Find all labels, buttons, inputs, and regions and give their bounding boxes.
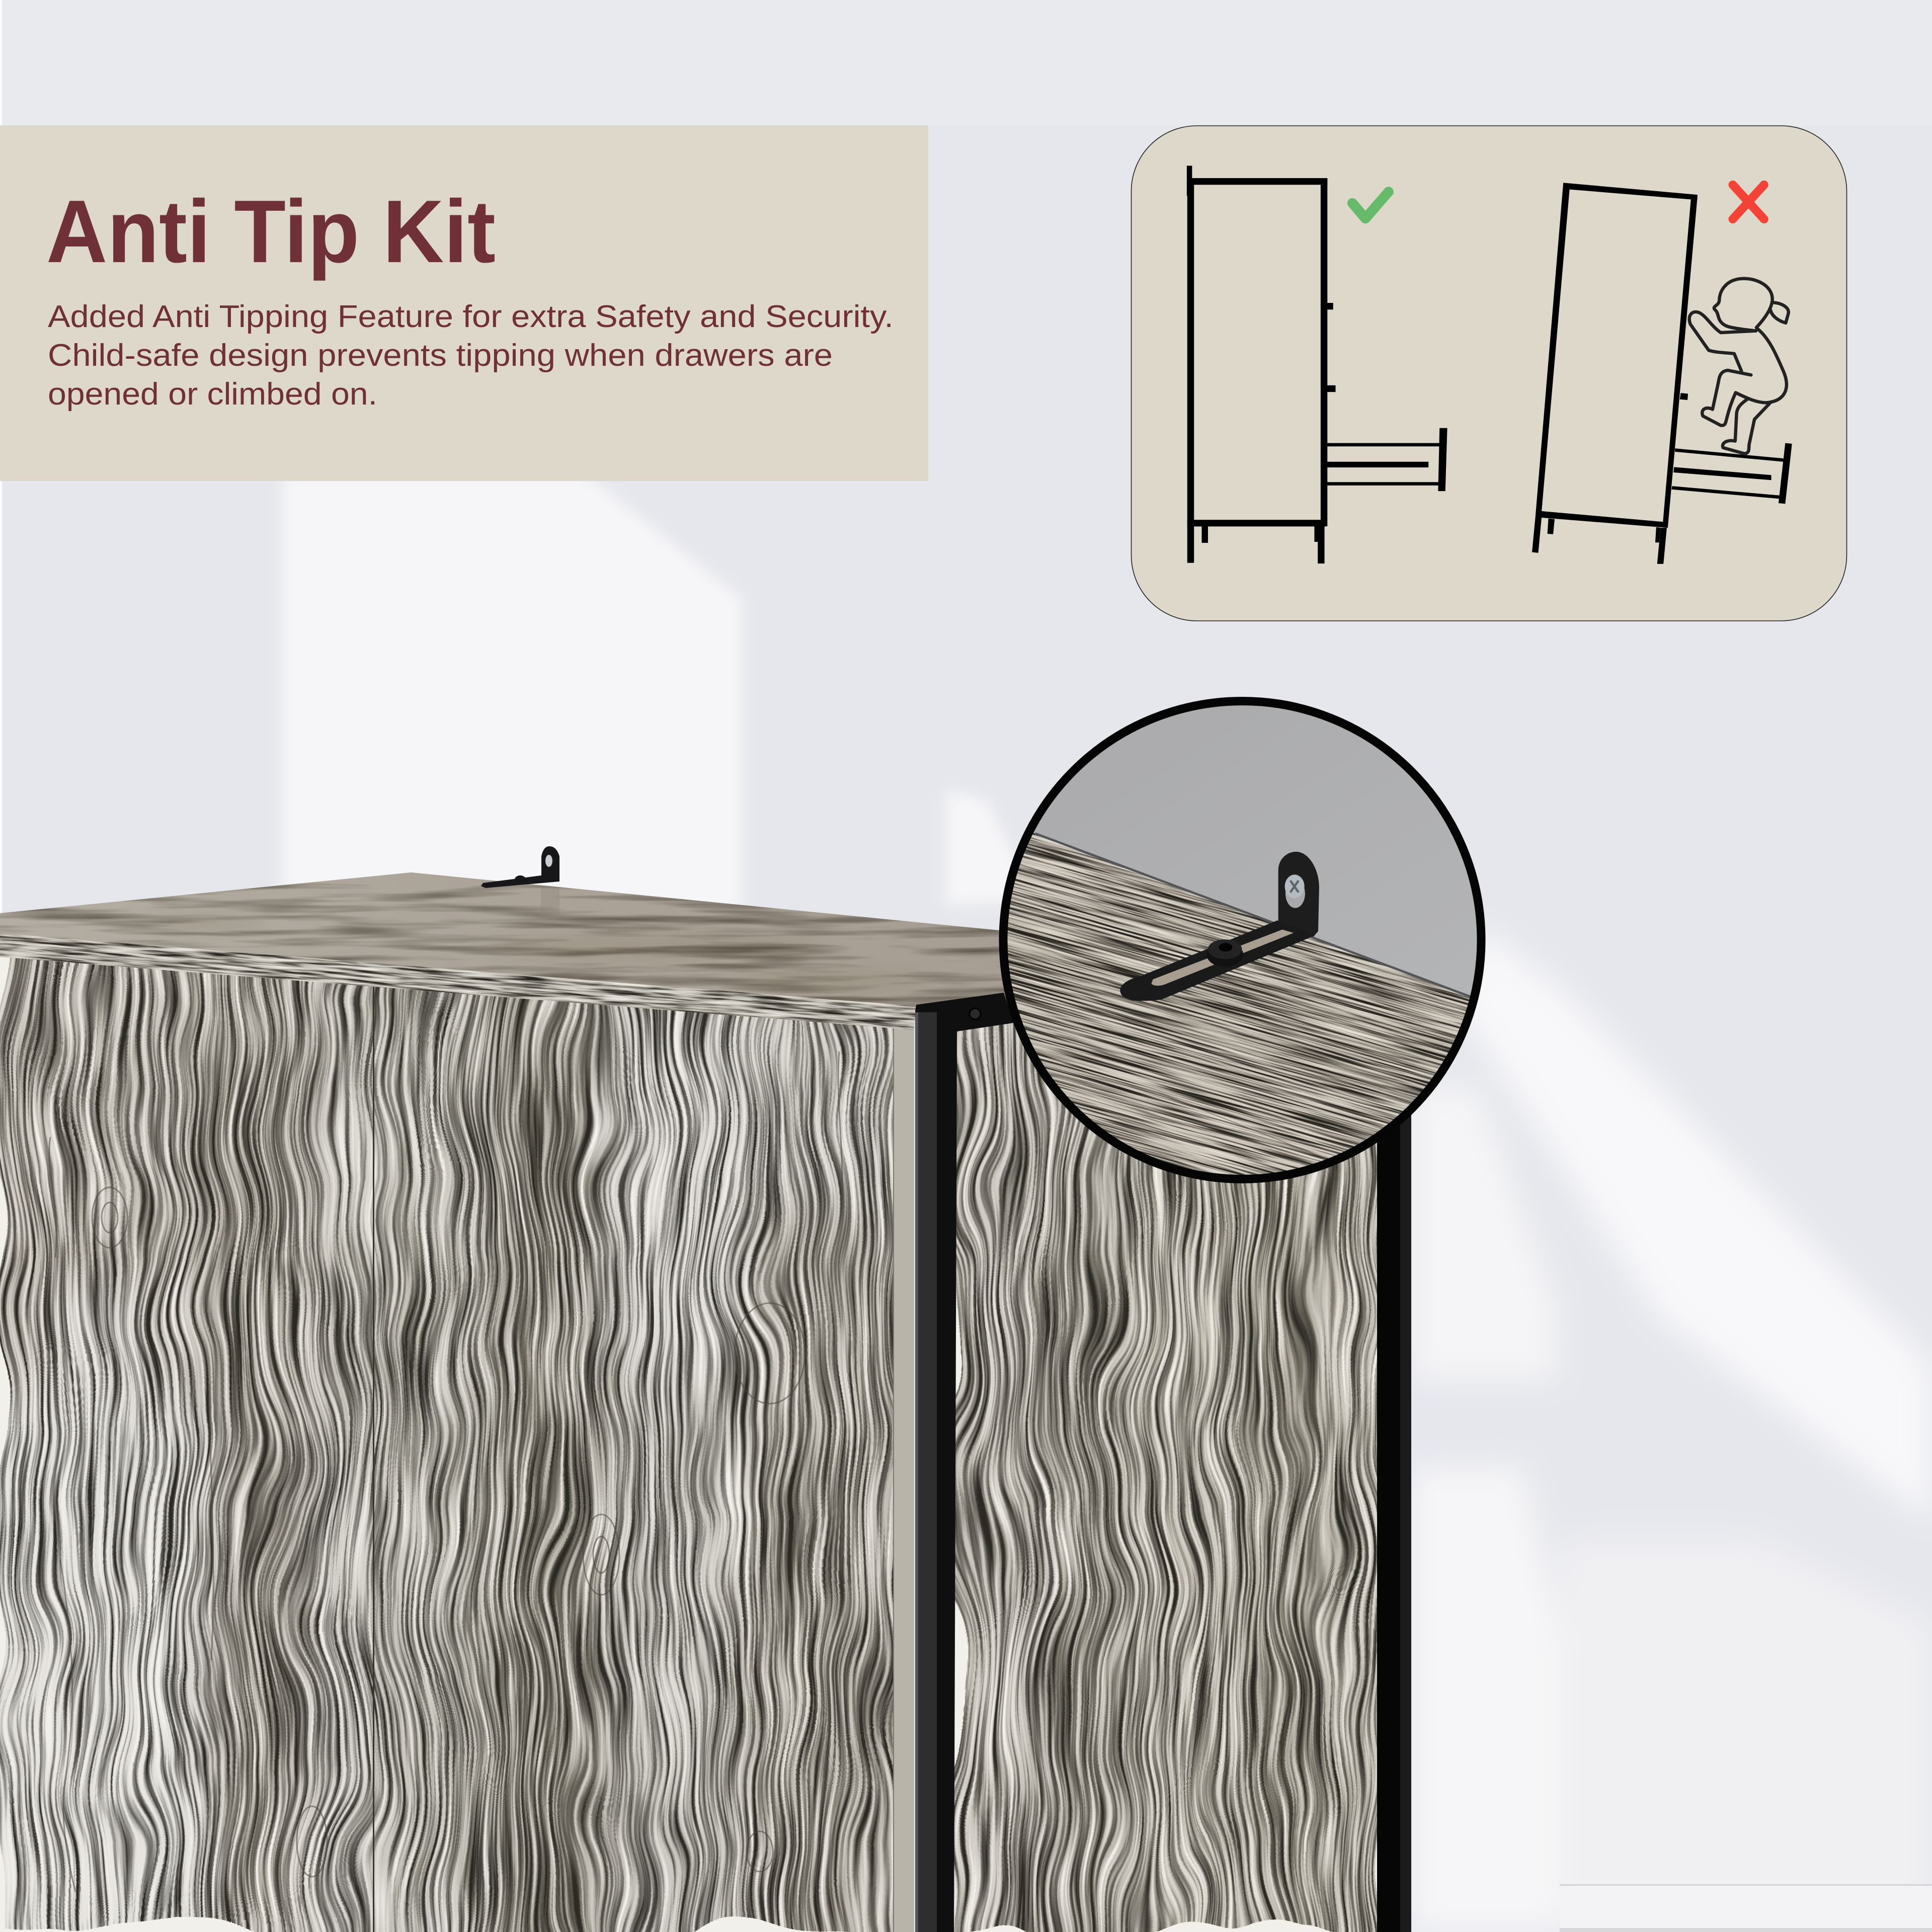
rear metal leg (1377, 1107, 1411, 1932)
description text: opened or climbed on. (48, 377, 377, 412)
safety pictogram panel (1131, 126, 1846, 621)
cabinet side panel (951, 1006, 1384, 1932)
cabinet front edge band (0, 933, 916, 1030)
incorrect: tipping cabinet with child climbing (1532, 183, 1792, 564)
description text: Added Anti Tipping Feature for extra Safety and Security. (48, 299, 894, 334)
inset wall (986, 684, 1509, 1011)
cabinet with wood grain and black metal legs (0, 846, 1411, 1932)
front metal leg (915, 993, 1014, 1932)
icon: green check mark (1352, 192, 1389, 218)
correct: anchored cabinet with open drawer (1187, 166, 1447, 564)
heading: Anti Tip Kit (46, 182, 496, 281)
title panel (0, 125, 928, 481)
inset L-shaped bracket (1120, 852, 1319, 1001)
small anti-tip bracket on cabinet (481, 846, 559, 888)
wood knots and cracks (49, 1052, 842, 1892)
inset magnifier: bracket close-up (792, 502, 1754, 1442)
inset wood top (792, 502, 1754, 1442)
description text: Child-safe design prevents tipping when drawers are (48, 338, 833, 373)
icon: climbing child outline (1689, 279, 1789, 454)
cabinet front doors (0, 906, 916, 1932)
inset ring (1003, 701, 1481, 1179)
cabinet top surface (0, 872, 1008, 1006)
description text (48, 299, 894, 412)
icon: red cross (1733, 185, 1764, 219)
